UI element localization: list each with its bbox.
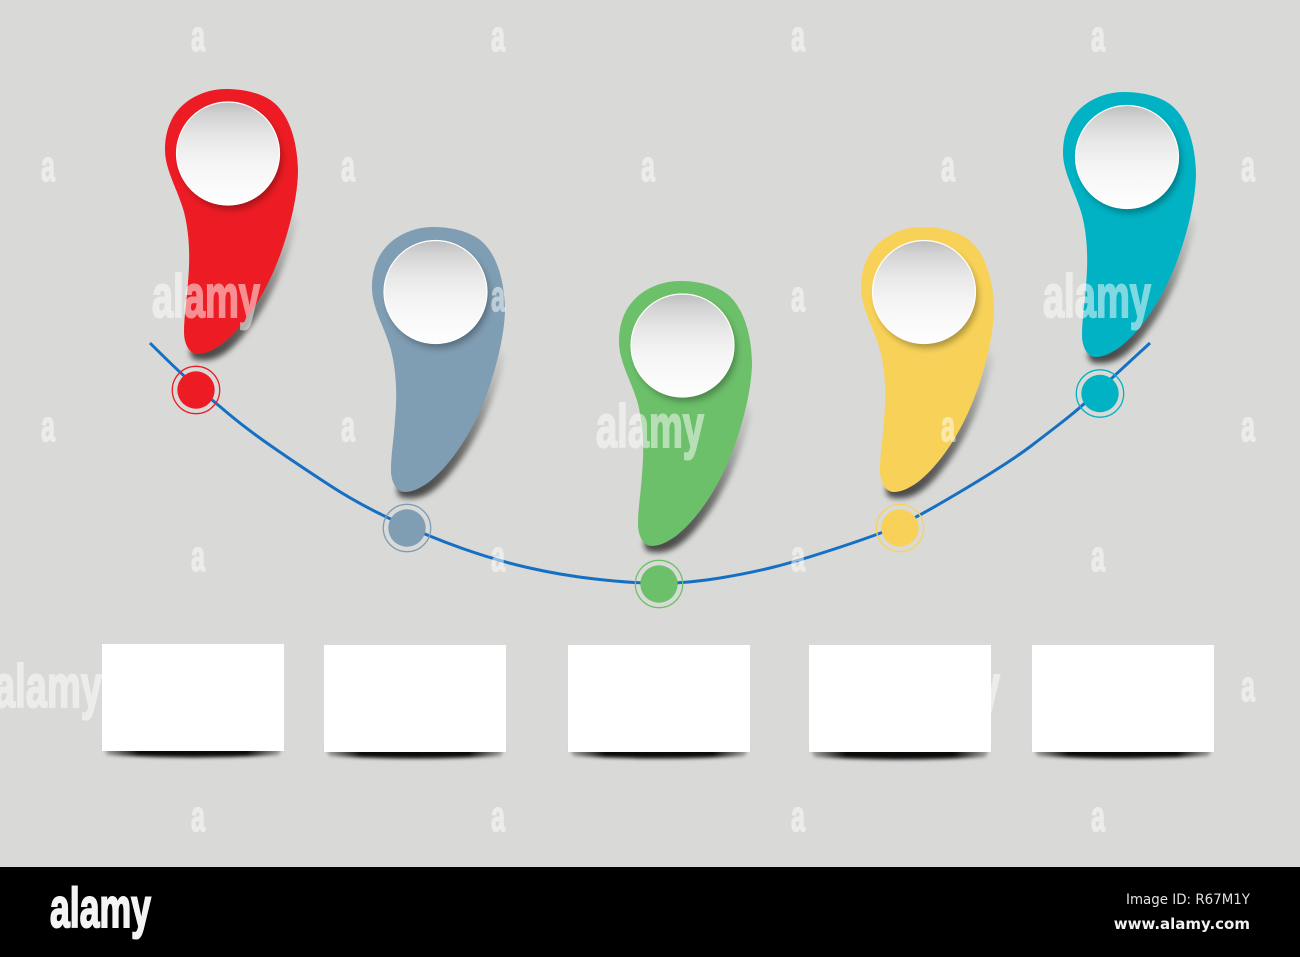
curved timeline: [150, 343, 1150, 584]
pin: red: [165, 89, 298, 360]
node: red: [172, 366, 220, 414]
pin body: [165, 89, 298, 354]
text box 4: [809, 645, 991, 760]
watermark: a: [1241, 142, 1255, 191]
watermark: a: [491, 272, 505, 321]
website: www.alamy.com: [1114, 915, 1250, 933]
watermark: alamy: [152, 263, 260, 330]
disc shadow: [1079, 111, 1181, 213]
disc shadow: [634, 300, 736, 402]
watermark: a: [191, 532, 205, 581]
watermark: a: [1091, 532, 1105, 581]
footer logo: alamy: [50, 876, 151, 939]
pin body: [372, 227, 505, 492]
pin: yellow: [861, 227, 994, 498]
pin: teal: [1063, 92, 1196, 363]
watermark: alamy: [596, 393, 704, 460]
watermark: a: [491, 532, 505, 581]
node: yellow: [876, 504, 924, 552]
footer bar: [0, 867, 1300, 957]
watermark: a: [641, 142, 655, 191]
pin body: [619, 281, 752, 546]
watermark: a: [191, 12, 205, 61]
watermark: a: [941, 402, 955, 451]
disc shadow: [180, 108, 282, 210]
watermark behind box 4: alamy: [892, 653, 1000, 720]
pin shadow: [644, 392, 751, 552]
watermark: a: [1241, 662, 1255, 711]
watermark: alamy: [1043, 263, 1151, 330]
pin shadow: [1088, 203, 1195, 363]
disc: [176, 102, 280, 205]
text box 2: [324, 645, 506, 758]
watermark: a: [341, 142, 355, 191]
disc: [1076, 106, 1178, 208]
watermark: a: [791, 12, 805, 61]
text box 1: [102, 644, 284, 758]
watermark: a: [491, 792, 505, 841]
pin: slate blue: [372, 227, 505, 498]
pin shadow: [397, 338, 504, 498]
disc: [872, 240, 976, 344]
text box 3: [568, 645, 750, 758]
pin shadow: [886, 338, 993, 498]
watermark: a: [1091, 792, 1105, 841]
watermark: a: [41, 142, 55, 191]
image id: Image ID: R67M1Y: [1126, 892, 1250, 908]
pin body: [861, 227, 994, 492]
watermark: a: [41, 402, 55, 451]
disc shadow: [388, 246, 490, 348]
node: green: [635, 560, 683, 608]
disc: [631, 294, 734, 397]
watermark: a: [491, 12, 505, 61]
disc shadow: [876, 246, 978, 348]
watermark: a: [791, 792, 805, 841]
watermark: a: [1091, 12, 1105, 61]
pin body: [1063, 92, 1196, 357]
watermark: a: [341, 402, 355, 451]
watermark: a: [941, 142, 955, 191]
watermark: a: [1241, 402, 1255, 451]
pin: green: [619, 281, 752, 552]
node: slate blue: [383, 504, 431, 552]
disc: [384, 240, 487, 344]
watermark: a: [791, 532, 805, 581]
node: teal: [1076, 370, 1124, 417]
text box 5: [1032, 645, 1214, 758]
pin shadow: [190, 200, 297, 360]
watermark: a: [791, 272, 805, 321]
watermark: a: [191, 792, 205, 841]
